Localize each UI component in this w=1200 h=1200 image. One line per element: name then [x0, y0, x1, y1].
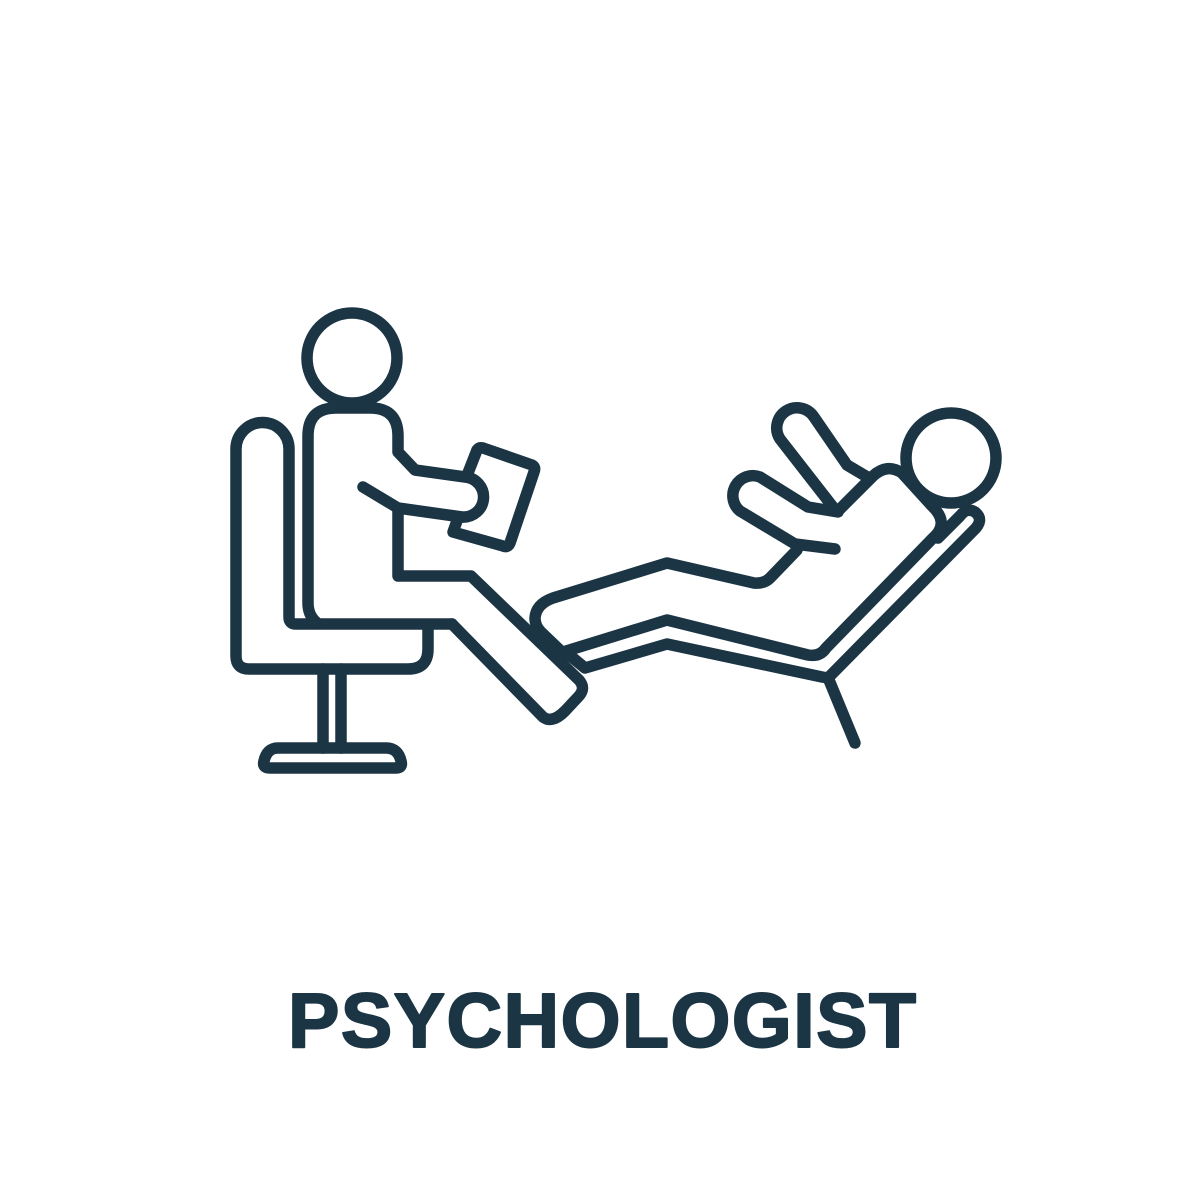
icon: office chair [236, 422, 452, 768]
icon: psychologist and patient [236, 313, 996, 768]
icon: reclining chaise [568, 510, 980, 678]
icon: psychologist figure [307, 313, 582, 719]
title: PSYCHOLOGIST [288, 978, 916, 1064]
icon: chaise leg [829, 680, 855, 743]
icon: patient figure [535, 408, 996, 655]
icon: notepad [453, 448, 535, 547]
